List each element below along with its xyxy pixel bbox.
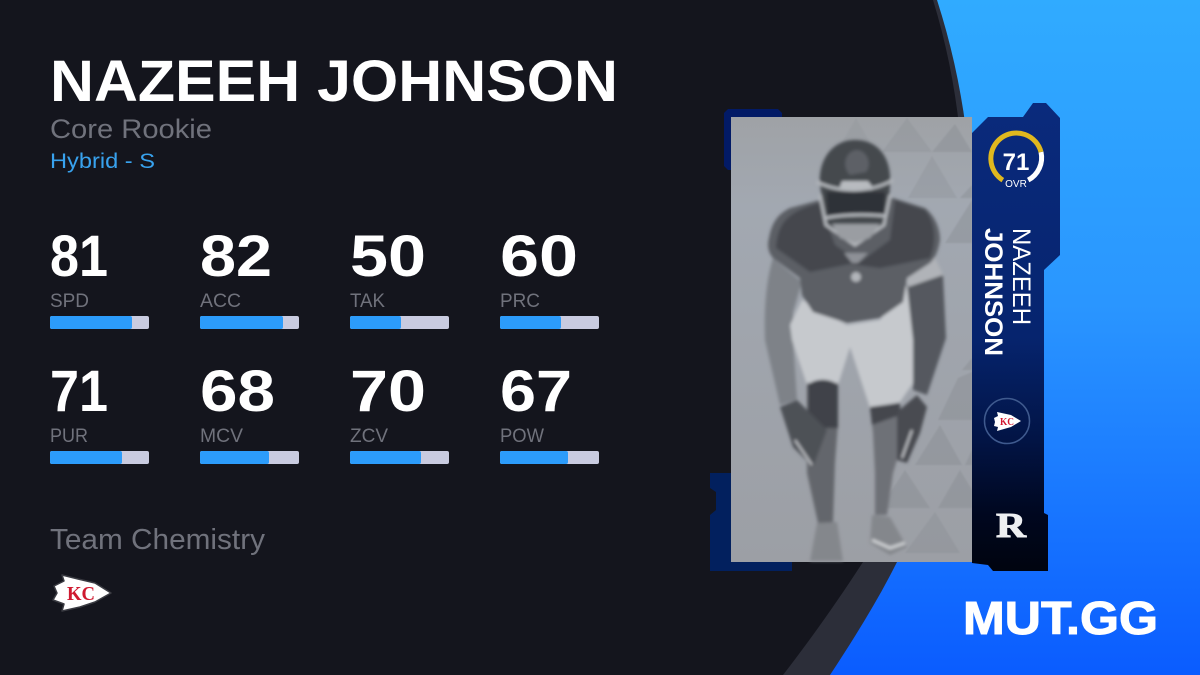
stat: MCV: MCV xyxy=(200,426,243,447)
card left tab top xyxy=(724,109,782,170)
stat: PUR: PUR xyxy=(50,426,88,447)
stats grid xyxy=(50,224,599,464)
player last name: JOHNSON xyxy=(979,228,1007,356)
stat: TAK: 50 xyxy=(350,224,426,289)
icon: Chiefs arrowhead logo xyxy=(53,575,111,611)
title: NAZEEH JOHNSON xyxy=(50,49,618,114)
player photo xyxy=(731,117,972,562)
face mask xyxy=(826,192,885,215)
stat: ACC: ACC xyxy=(200,291,241,312)
stat: PUR: 71 xyxy=(50,359,108,424)
subtitle: card program: Core Rookie xyxy=(50,114,212,144)
right glove xyxy=(897,395,927,463)
card strip xyxy=(972,103,1060,571)
right leg xyxy=(870,403,903,515)
stat: PRC xyxy=(500,224,599,329)
player first name: NAZEEH xyxy=(1007,228,1035,325)
card bottom edge xyxy=(710,560,792,571)
stat: PRC: 60 xyxy=(500,224,578,289)
stat: POW xyxy=(500,359,599,464)
left leg xyxy=(807,383,838,523)
right forearm xyxy=(906,275,946,395)
MUT.GG logo: MUT.GG xyxy=(963,592,1158,644)
stat: TAK: TAK xyxy=(350,291,385,312)
team badge: KC xyxy=(1000,416,1014,428)
icon: Chiefs arrowhead logo: KC xyxy=(67,583,95,605)
helmet xyxy=(820,140,890,245)
stat: PUR xyxy=(50,359,149,464)
team badge xyxy=(984,398,1030,444)
OVR rating ring: 71 xyxy=(1003,149,1029,176)
stat: MCV: 68 xyxy=(200,359,275,424)
OVR rating ring: OVR xyxy=(1005,179,1027,190)
left arm xyxy=(765,258,802,405)
stat: SPD: SPD xyxy=(50,291,89,312)
stat: TAK xyxy=(350,224,449,329)
stat: MCV xyxy=(200,359,299,464)
stat: POW: 67 xyxy=(500,359,572,424)
jersey xyxy=(768,198,940,323)
stat: ZCV xyxy=(350,359,449,464)
triangle pattern xyxy=(832,118,972,553)
stat: PRC: PRC xyxy=(500,291,540,312)
left glove xyxy=(780,400,827,467)
stat: SPD xyxy=(50,224,149,329)
card left tab bottom xyxy=(710,473,732,571)
jersey logo xyxy=(851,272,861,282)
rookie R badge: R xyxy=(996,506,1027,545)
shoes xyxy=(810,522,843,561)
stat: ZCV: ZCV xyxy=(350,426,388,447)
stat: SPD: 81 xyxy=(50,224,108,289)
stat: POW: POW xyxy=(500,426,544,447)
stat: ACC xyxy=(200,224,299,329)
subtitle: position: Hybrid - S xyxy=(50,150,155,173)
OVR rating ring xyxy=(991,133,1042,190)
stat: ACC: 82 xyxy=(200,224,272,289)
team chemistry heading: Team Chemistry xyxy=(50,524,265,556)
stat: ZCV: 70 xyxy=(350,359,426,424)
white pants xyxy=(790,285,913,408)
player card xyxy=(710,103,1060,571)
